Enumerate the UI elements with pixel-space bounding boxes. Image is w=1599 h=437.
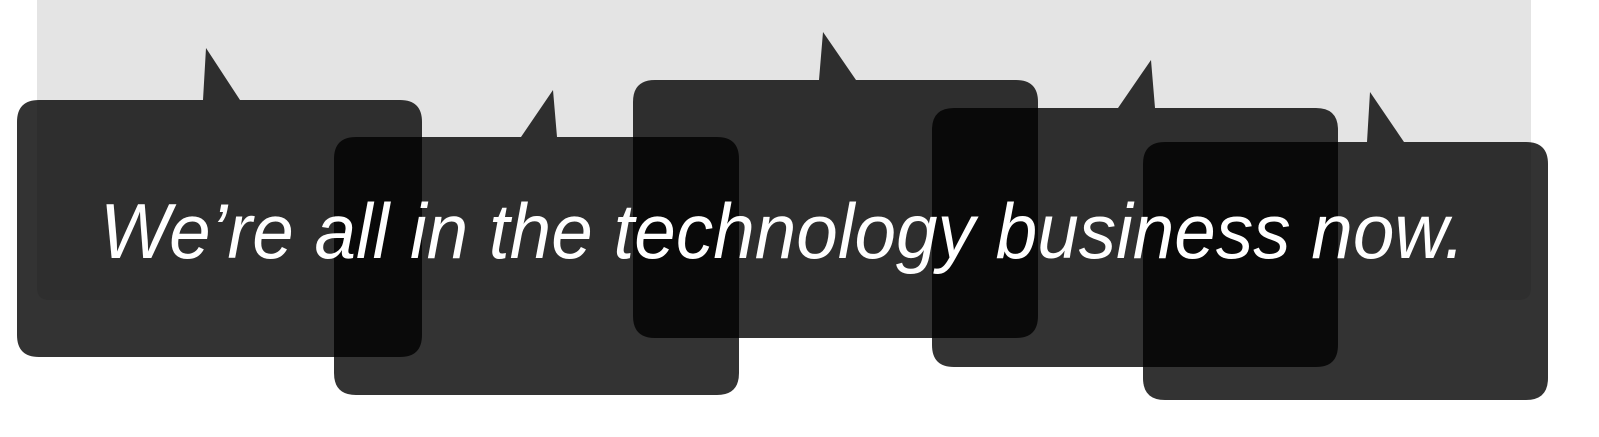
- bubble 3: [633, 32, 1038, 338]
- background panel: [37, 0, 1531, 300]
- bubble 5: [1143, 92, 1548, 400]
- bubble 2: [334, 90, 739, 395]
- tagline: We’re all in the technology business now.: [100, 187, 1465, 275]
- bubble 4: [932, 60, 1338, 367]
- bubble 1: [17, 48, 422, 357]
